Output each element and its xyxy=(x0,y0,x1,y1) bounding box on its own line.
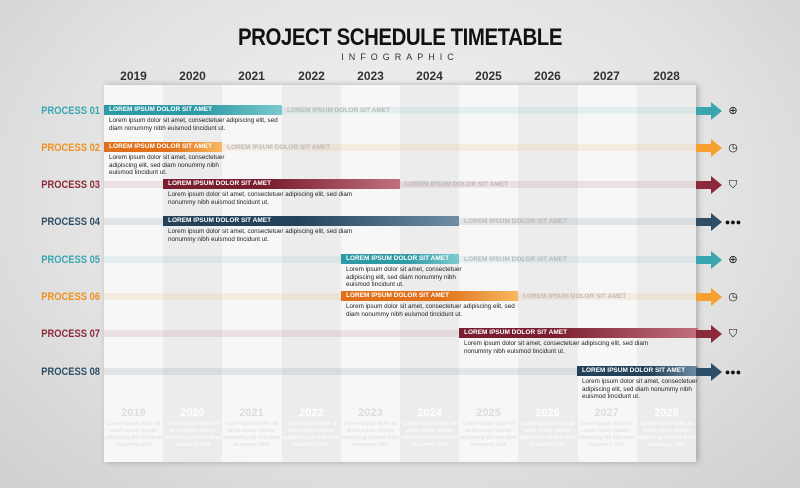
bottom faded years: 2028 xyxy=(654,407,679,419)
row: process 02: LOREM IPSUM DOLOR SIT AMET xyxy=(227,144,330,151)
row: process 05: PROCESS 05 xyxy=(41,254,100,266)
row: process 01 xyxy=(41,105,696,132)
row: process 08: PROCESS 08 xyxy=(41,366,100,378)
row: process 02: PROCESS 02 xyxy=(41,142,100,154)
row: process 04: LOREM IPSUM DOLOR SIT AMET xyxy=(464,218,567,225)
row: process 07: LOREM IPSUM DOLOR SIT AMET xyxy=(464,329,567,336)
row: process 01: LOREM IPSUM DOLOR SIT AMET xyxy=(109,106,212,113)
row: process 01: Lorem ipsum dolor sit amet, consectetuer adipiscing elit, sed diam nonummy nibh euismod tincidunt ut. xyxy=(109,117,278,132)
row: process 04: LOREM IPSUM DOLOR SIT AMET xyxy=(168,217,271,224)
bottom faded years: 2025 xyxy=(476,407,501,419)
arrows xyxy=(696,102,722,381)
row: process 03: PROCESS 03 xyxy=(41,179,100,191)
bottom faded years: 2019 xyxy=(121,407,146,419)
row: process 06 xyxy=(41,291,696,318)
year headers: 2024 xyxy=(416,69,443,83)
year headers: 2021 xyxy=(238,69,265,83)
row: process 05: Lorem ipsum dolor sit amet, consectetuer adipiscing elit, sed diam nonummy nibh euismod tincidunt ut. xyxy=(346,266,462,288)
icons: ⊕ xyxy=(728,254,738,266)
bottom faded years: Lorem ipsum dolor sit amet conse ctetuer adipiscing elit sed diam nonummy nibh xyxy=(519,421,576,448)
row: process 05: LOREM IPSUM DOLOR SIT AMET xyxy=(464,256,567,263)
icons: ◷ xyxy=(728,142,738,154)
row: process 05: LOREM IPSUM DOLOR SIT AMET xyxy=(346,255,449,262)
row: process 04 xyxy=(41,216,696,242)
row: process 04: Lorem ipsum dolor sit amet, consectetuer adipiscing elit, sed diam nonummy nibh euismod tincidunt ut. xyxy=(168,228,352,242)
icons: ●●● xyxy=(725,217,741,227)
row: process 08 xyxy=(41,366,698,400)
row: process 02: Lorem ipsum dolor sit amet, consectetuer adipiscing elit, sed diam nonummy nibh euismod tincidunt ut. xyxy=(109,154,224,176)
row: process 02 xyxy=(41,142,696,176)
row: process 06: LOREM IPSUM DOLOR SIT AMET xyxy=(523,293,626,300)
year headers: 2020 xyxy=(179,69,206,83)
bottom faded years: Lorem ipsum dolor sit amet conse ctetuer adipiscing elit sed diam nonummy nibh xyxy=(460,421,517,448)
year headers: 2027 xyxy=(593,69,620,83)
bottom faded years: Lorem ipsum dolor sit amet conse ctetuer adipiscing elit sed diam nonummy nibh xyxy=(578,421,635,448)
icons xyxy=(725,105,741,377)
row: process 02: LOREM IPSUM DOLOR SIT AMET xyxy=(109,143,212,150)
bottom faded years: Lorem ipsum dolor sit amet conse ctetuer adipiscing elit sed diam nonummy nibh xyxy=(342,421,399,448)
row: process 06: Lorem ipsum dolor sit amet, consectetuer adipiscing elit, sed diam nonummy nibh euismod tincidunt ut. xyxy=(346,303,515,318)
year headers: 2026 xyxy=(534,69,561,83)
bottom faded years: Lorem ipsum dolor sit amet conse ctetuer adipiscing elit sed diam nonummy nibh xyxy=(223,421,280,448)
bottom faded years: 2027 xyxy=(594,407,619,419)
bottom faded years: Lorem ipsum dolor sit amet conse ctetuer adipiscing elit sed diam nonummy nibh xyxy=(164,421,221,448)
year headers: 2028 xyxy=(653,69,680,83)
bottom faded years: Lorem ipsum dolor sit amet conse ctetuer adipiscing elit sed diam nonummy nibh xyxy=(401,421,458,448)
bottom faded years xyxy=(105,407,695,448)
subtitle: INFOGRAPHIC xyxy=(341,52,459,62)
board panel xyxy=(104,85,696,462)
row: process 07: PROCESS 07 xyxy=(41,328,100,340)
row: process 03 xyxy=(41,179,696,206)
icons: ●●● xyxy=(725,367,741,377)
row: process 03: Lorem ipsum dolor sit amet, consectetuer adipiscing elit, sed diam nonummy nibh euismod tincidunt ut. xyxy=(168,191,352,206)
icons: ⛉ xyxy=(729,179,737,191)
row: process 05 xyxy=(41,254,696,288)
icons: ◷ xyxy=(728,291,738,303)
bottom faded years: Lorem ipsum dolor sit amet conse ctetuer adipiscing elit sed diam nonummy nibh xyxy=(638,421,695,448)
row: process 03: LOREM IPSUM DOLOR SIT AMET xyxy=(168,180,271,187)
bottom faded years: 2023 xyxy=(358,407,383,419)
bottom faded years: 2021 xyxy=(239,407,264,419)
row: process 01: LOREM IPSUM DOLOR SIT AMET xyxy=(287,107,390,114)
year headers: 2019 xyxy=(120,69,147,83)
row: process 06: PROCESS 06 xyxy=(41,291,100,303)
bottom faded years: Lorem ipsum dolor sit amet conse ctetuer adipiscing elit sed diam nonummy nibh xyxy=(283,421,340,448)
icons: ⛉ xyxy=(729,328,737,340)
year headers xyxy=(120,69,680,83)
row: process 06: LOREM IPSUM DOLOR SIT AMET xyxy=(346,292,449,299)
year headers: 2022 xyxy=(298,69,325,83)
bottom faded years: 2024 xyxy=(417,407,442,419)
bottom faded years: 2022 xyxy=(299,407,324,419)
row: process 07 xyxy=(41,328,698,354)
row: process 04: PROCESS 04 xyxy=(41,216,100,228)
row: process 08: Lorem ipsum dolor sit amet, consectetuer adipiscing elit, sed diam nonummy nibh euismod tincidunt ut. xyxy=(582,378,698,400)
bottom faded years: 2026 xyxy=(535,407,560,419)
title: PROJECT SCHEDULE TIMETABLE xyxy=(238,24,562,51)
year headers: 2025 xyxy=(475,69,502,83)
year headers: 2023 xyxy=(357,69,384,83)
row: process 07: Lorem ipsum dolor sit amet, consectetuer adipiscing elit, sed diam nonummy nibh euismod tincidunt ut. xyxy=(464,340,648,354)
bottom faded years: Lorem ipsum dolor sit amet conse ctetuer adipiscing elit sed diam nonummy nibh xyxy=(105,421,162,448)
row: process 03: LOREM IPSUM DOLOR SIT AMET xyxy=(405,181,508,188)
icons: ⊕ xyxy=(728,105,738,117)
row: process 01: PROCESS 01 xyxy=(41,105,100,117)
bottom faded years: 2020 xyxy=(180,407,205,419)
row: process 08: LOREM IPSUM DOLOR SIT AMET xyxy=(582,367,685,374)
